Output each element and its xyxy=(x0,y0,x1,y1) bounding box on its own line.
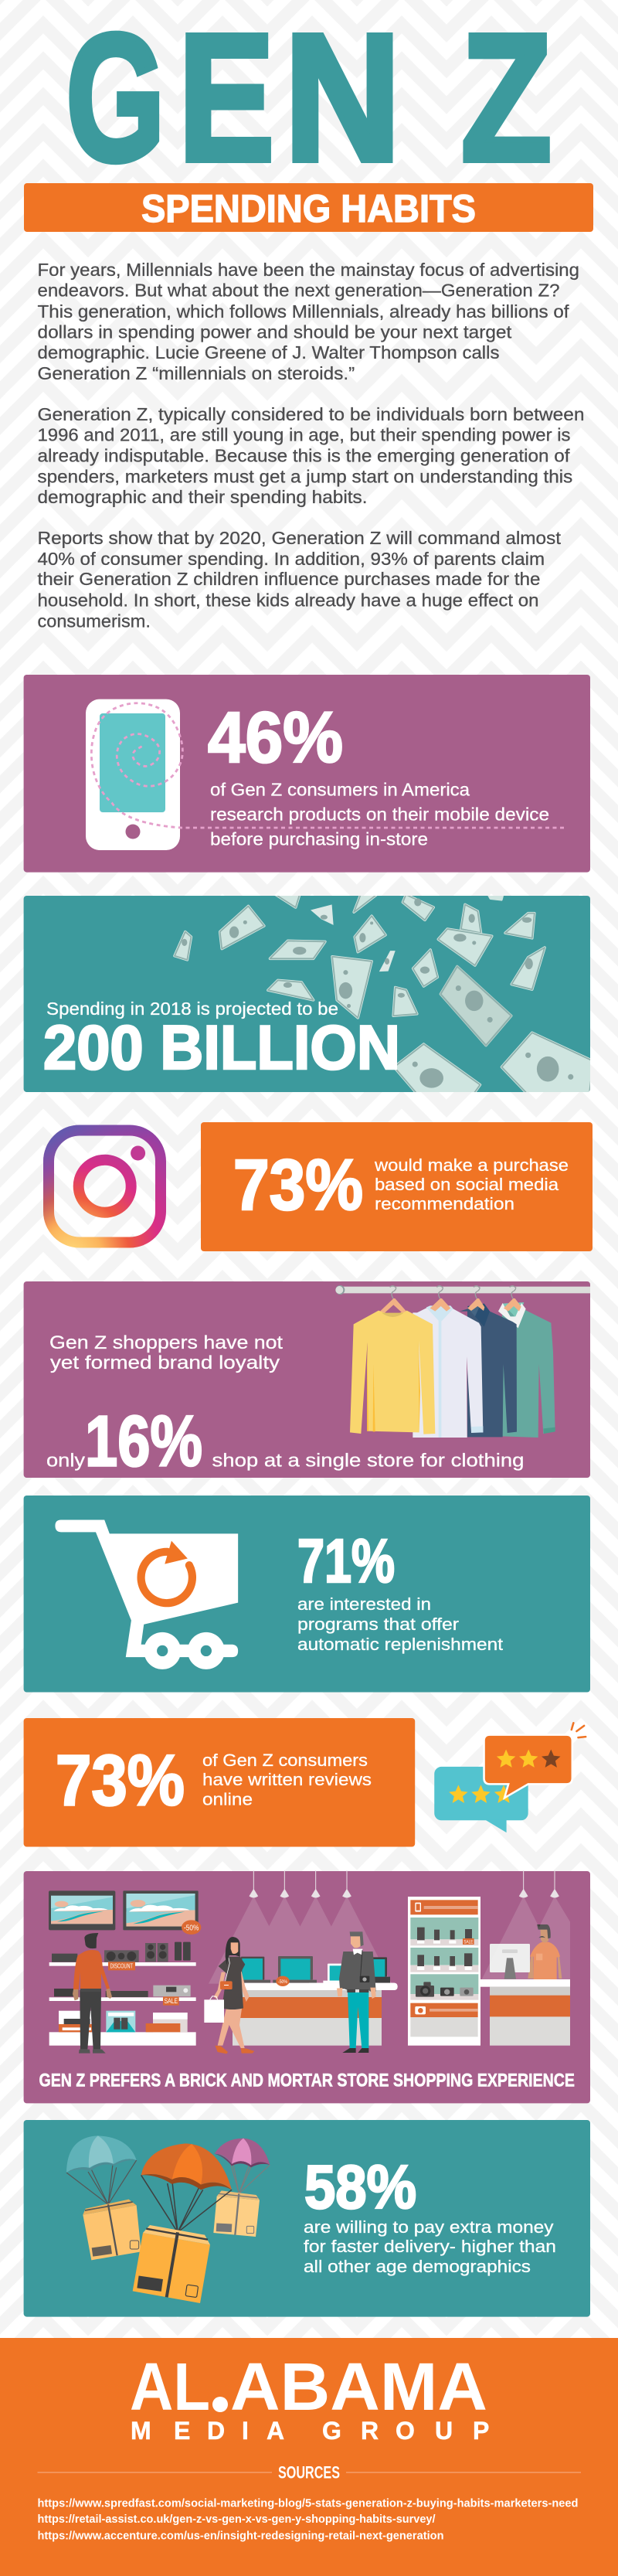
intro paragraph 1: For years, Millennials have been the mainstay focus of advertising xyxy=(37,260,579,280)
intro paragraph 2: already indisputable. Because this is the emerging generation of xyxy=(37,445,570,465)
stat: 16%: 16% xyxy=(85,1400,202,1481)
logo: Alabama Media Group: AL xyxy=(130,2350,210,2425)
intro paragraph 1: dollars in spending power and should be your next target xyxy=(37,322,512,342)
panel: 58% faster delivery xyxy=(24,2120,590,2317)
intro paragraph 2: Generation Z, typically considered to be individuals born between xyxy=(37,404,584,424)
intro paragraph 1: endeavors. But what about the next generation—Generation Z? xyxy=(37,281,559,301)
source links xyxy=(37,2498,578,2543)
panel: 46% mobile research xyxy=(24,675,590,873)
intro paragraph 2: demographic and their spending habits. xyxy=(37,487,368,507)
text: faster delivery caption: all other age demographics xyxy=(304,2257,531,2276)
text: faster delivery caption: for faster delivery- higher than xyxy=(304,2237,556,2256)
intro paragraph 1: This generation, which follows Millennials, already has billions of xyxy=(37,301,569,322)
yellow sweater xyxy=(350,1311,435,1434)
icon: instagram logo xyxy=(49,1130,161,1243)
logo: Alabama Media Group xyxy=(130,2350,489,2445)
teal parachute parcel xyxy=(66,2135,141,2260)
text: social recommendation caption: recommendation xyxy=(375,1194,514,1213)
subtitle banner: spending habits xyxy=(24,183,593,232)
text: spending projection: Spending in 2018 is projected to be xyxy=(46,999,338,1019)
laptops at counter xyxy=(328,1964,348,1982)
icon: shopping cart with refresh arrow xyxy=(55,1520,238,1669)
pink parachute parcel xyxy=(213,2139,270,2237)
subtitle banner: spending habits: SPENDING HABITS xyxy=(141,187,476,230)
intro paragraph 1 xyxy=(37,260,579,383)
intro paragraph 1: Generation Z “millennials on steroids.” xyxy=(37,363,355,383)
text: brand loyalty: only xyxy=(46,1451,85,1472)
text: replenishment caption xyxy=(297,1594,503,1654)
illustration: electronics store, left side: -50% xyxy=(278,1979,287,1985)
shop assistant behind counter xyxy=(528,1924,562,1980)
text: single store: shop at a single store for clothing xyxy=(212,1451,524,1472)
title: GEN Z: N xyxy=(284,0,401,199)
woman with shopping bag xyxy=(204,1937,254,2054)
hangers xyxy=(380,1298,521,1313)
text: reviews caption: online xyxy=(202,1789,253,1809)
green shirt xyxy=(497,1310,555,1438)
display shelf unit xyxy=(408,1897,480,2046)
text: brand loyalty: yet formed brand loyalty xyxy=(50,1353,280,1373)
text: reviews caption: have written reviews xyxy=(202,1770,372,1789)
logo: Alabama Media Group: ABAMA xyxy=(230,2350,487,2425)
text: faster delivery caption: are willing to pay extra money xyxy=(304,2217,553,2237)
illustration: falling money xyxy=(175,895,593,1094)
text: replenishment caption: automatic replenishment xyxy=(297,1635,503,1654)
icon: smartphone with dotted spiral xyxy=(86,699,564,850)
logo: Alabama Media Group: MEDIA GROUP xyxy=(131,2417,489,2445)
panel: 16% clothing brand loyalty xyxy=(24,1281,595,1481)
intro paragraph 3: consumerism. xyxy=(37,611,151,631)
intro paragraph 2 xyxy=(37,404,584,507)
intro paragraph 2: 1996 and 2011, are still young in age, but their spending power is xyxy=(37,425,570,445)
intro paragraph 3: household. In short, these kids already have a huge effect on xyxy=(37,590,539,610)
text: mobile research caption: before purchasing in-store xyxy=(210,829,428,849)
illustration: electronics store, left side: SALE xyxy=(165,1997,178,2005)
stat: 58%: 58% xyxy=(304,2152,416,2221)
man with camera xyxy=(337,1931,376,2053)
source links: https://www.accenture.com/us-en/insight-redesigning-retail-next-generation xyxy=(37,2530,443,2543)
cash counter xyxy=(480,1979,570,1987)
title: GEN Z xyxy=(66,0,552,199)
text: replenishment caption: are interested in xyxy=(297,1594,431,1614)
text: reviews caption: of Gen Z consumers xyxy=(202,1751,368,1770)
panel: 73% social media recommendation xyxy=(201,1122,593,1251)
illustration: parcels on parachutes xyxy=(66,2135,270,2303)
shelves xyxy=(49,1962,196,2046)
intro paragraph 3: 40% of consumer spending. In addition, 93% of parents claim xyxy=(37,549,545,569)
stat: 73%: 73% xyxy=(233,1145,363,1225)
title: GEN Z: G xyxy=(66,0,165,199)
title: GEN Z: E xyxy=(178,0,274,199)
text: mobile research caption xyxy=(210,780,549,849)
text: brand loyalty: Gen Z shoppers have not xyxy=(49,1332,283,1353)
text: social recommendation caption xyxy=(374,1155,569,1213)
televisions xyxy=(49,1890,115,1930)
panel: 200 billion spending xyxy=(24,895,593,1094)
text: mobile research caption: of Gen Z consumers in America xyxy=(210,780,470,800)
text: social recommendation caption: would make a purchase xyxy=(374,1155,569,1175)
illustration: electronics store, left side: DISCOUNT xyxy=(110,1962,133,1970)
title: GEN Z: Z xyxy=(461,0,552,199)
white shirt xyxy=(413,1306,483,1438)
intro paragraph 3 xyxy=(37,528,562,631)
stat: 73%: 73% xyxy=(56,1741,185,1821)
intro paragraph 2: spenders, marketers must get a jump start on understanding this xyxy=(37,466,572,486)
stat: 46%: 46% xyxy=(208,697,343,778)
man in orange sweater xyxy=(73,1933,112,2054)
illustration: electronics store, right side: SALE xyxy=(464,1939,474,1945)
navy shirt xyxy=(460,1304,517,1437)
text: mobile research caption: research products on their mobile device xyxy=(210,805,549,825)
panel: 73% written reviews xyxy=(24,1718,415,1847)
illustration: electronics store, left side xyxy=(49,1870,398,2054)
stat: 200 billion: 200 BILLION xyxy=(43,1013,400,1083)
source links: https://retail-assist.co.uk/gen-z-vs-gen-x-vs-gen-y-shopping-habits-survey/ xyxy=(37,2513,436,2526)
illustration: shirts on a clothes rail xyxy=(335,1285,595,1438)
heading: sources: SOURCES xyxy=(278,2462,340,2482)
text: brand loyalty xyxy=(46,1332,283,1472)
intro paragraph 3: their Generation Z children influence purchases made for the xyxy=(37,569,541,589)
counter, left part xyxy=(233,1990,382,2046)
panel: 71% automatic replenishment xyxy=(24,1496,590,1693)
text: faster delivery caption xyxy=(304,2217,556,2276)
intro paragraph 1: demographic. Lucie Greene of J. Walter Thompson calls xyxy=(37,342,499,362)
text: social recommendation caption: based on social media xyxy=(375,1175,559,1194)
text: replenishment caption: programs that offer xyxy=(297,1615,459,1634)
intro paragraph 3: Reports show that by 2020, Generation Z will command almost xyxy=(37,528,562,548)
orange parachute parcel xyxy=(133,2143,232,2303)
icon: review speech bubbles with stars xyxy=(434,1723,586,1832)
illustration: electronics store, right side xyxy=(309,1870,570,2053)
text: reviews caption xyxy=(202,1751,372,1809)
illustration: electronics store, left side: -50% xyxy=(184,1924,199,1932)
stat: 71%: 71% xyxy=(297,1526,395,1595)
footer xyxy=(0,2338,618,2576)
source links: https://www.spredfast.com/social-marketing-blog/5-stats-generation-z-buying-habits-marketers-need xyxy=(37,2498,578,2510)
panel: brick and mortar store xyxy=(24,1870,590,2103)
